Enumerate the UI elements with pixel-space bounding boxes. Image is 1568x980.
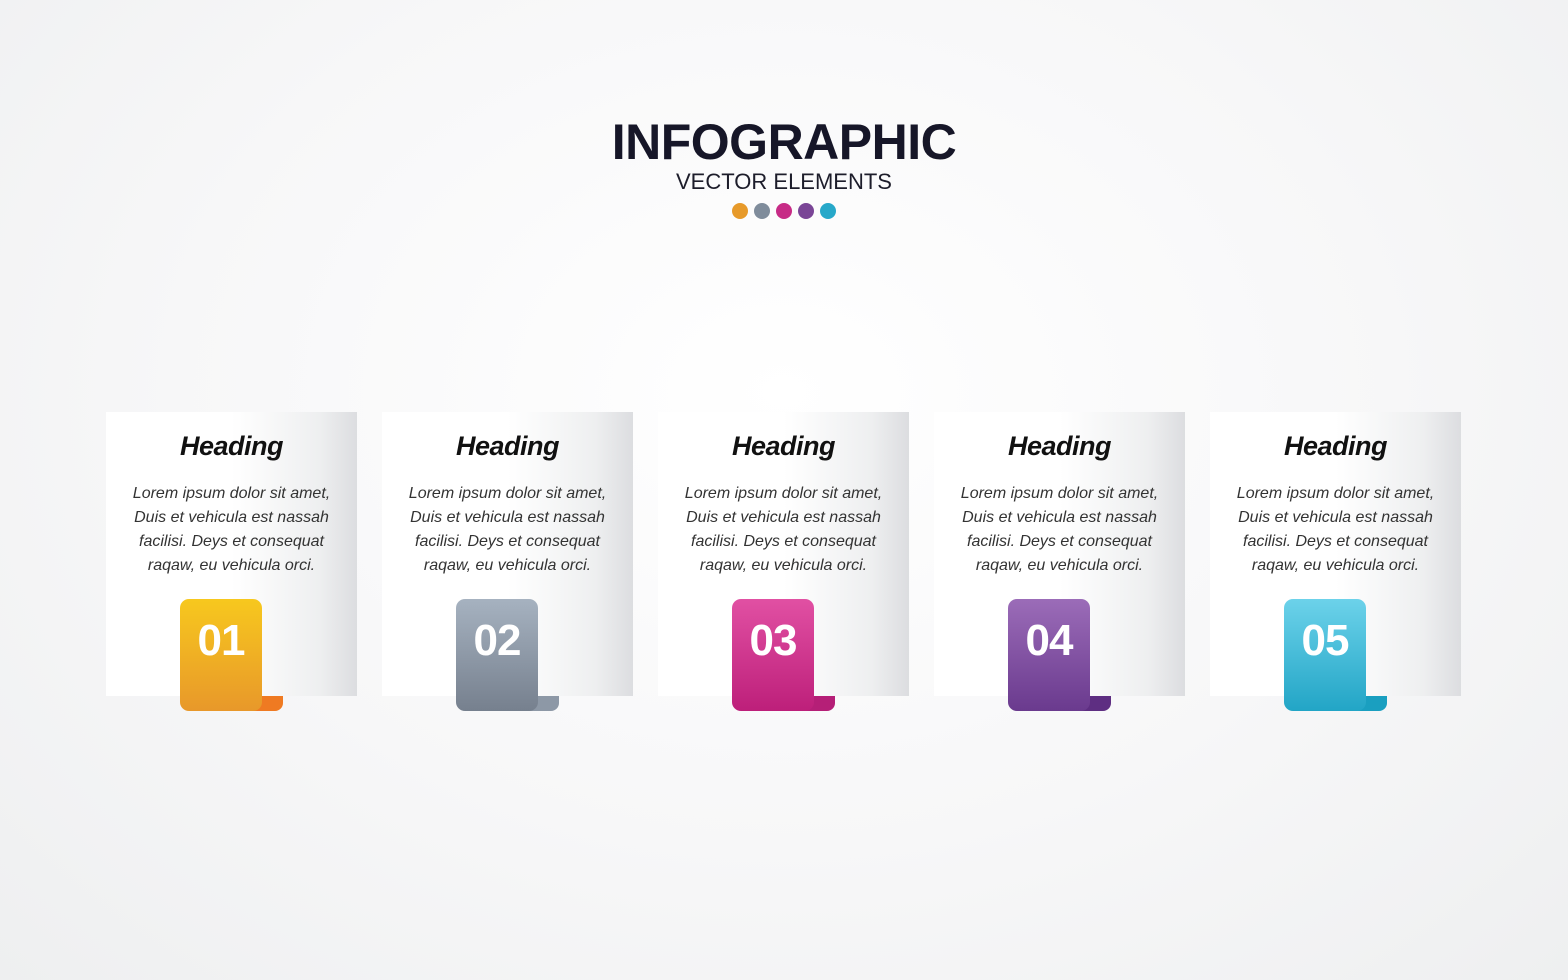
heading: Heading — [180, 431, 283, 461]
heading: Heading — [1284, 431, 1387, 461]
text block: facilisi. Deys et consequat — [139, 533, 324, 550]
text block: Duis et vehicula est nassah — [410, 509, 605, 526]
text block: Duis et vehicula est nassah — [686, 509, 881, 526]
text block: raqaw, eu vehicula orci. — [976, 557, 1143, 574]
text block — [133, 485, 330, 574]
text block: raqaw, eu vehicula orci. — [148, 557, 315, 574]
text block — [685, 485, 882, 574]
text block: Lorem ipsum dolor sit amet, — [961, 485, 1158, 502]
badge 02: 02 — [474, 616, 520, 665]
badge 05 — [1284, 599, 1387, 711]
text block: raqaw, eu vehicula orci. — [700, 557, 867, 574]
text block: raqaw, eu vehicula orci. — [424, 557, 591, 574]
text block — [409, 485, 606, 574]
badge 03 — [732, 599, 835, 711]
text block: facilisi. Deys et consequat — [415, 533, 600, 550]
color dots — [732, 203, 836, 219]
badge 01: 01 — [198, 616, 244, 665]
panel: step 02 — [382, 412, 633, 696]
text block: Duis et vehicula est nassah — [1238, 509, 1433, 526]
text block: facilisi. Deys et consequat — [967, 533, 1152, 550]
text block: facilisi. Deys et consequat — [691, 533, 876, 550]
text block: Duis et vehicula est nassah — [962, 509, 1157, 526]
text block: Lorem ipsum dolor sit amet, — [685, 485, 882, 502]
heading: Heading — [1008, 431, 1111, 461]
text block — [1237, 485, 1434, 574]
text block: Lorem ipsum dolor sit amet, — [409, 485, 606, 502]
panel: step 01 — [106, 412, 357, 696]
text block: Lorem ipsum dolor sit amet, — [133, 485, 330, 502]
badge 03: 03 — [750, 616, 796, 665]
heading: Heading — [456, 431, 559, 461]
badge 04: 04 — [1026, 616, 1072, 665]
text block: facilisi. Deys et consequat — [1243, 533, 1428, 550]
badge 04 — [1008, 599, 1111, 711]
panel: step 05 — [1210, 412, 1461, 696]
badge 01 — [180, 599, 283, 711]
text block: raqaw, eu vehicula orci. — [1252, 557, 1419, 574]
subtitle: VECTOR ELEMENTS — [676, 169, 892, 194]
text block — [961, 485, 1158, 574]
badge 02 — [456, 599, 559, 711]
heading: Heading — [732, 431, 835, 461]
title: INFOGRAPHIC — [612, 114, 956, 170]
badge 05: 05 — [1302, 616, 1348, 665]
panel: step 04 — [934, 412, 1185, 696]
text block: Duis et vehicula est nassah — [134, 509, 329, 526]
panel: step 03 — [658, 412, 909, 696]
text block: Lorem ipsum dolor sit amet, — [1237, 485, 1434, 502]
